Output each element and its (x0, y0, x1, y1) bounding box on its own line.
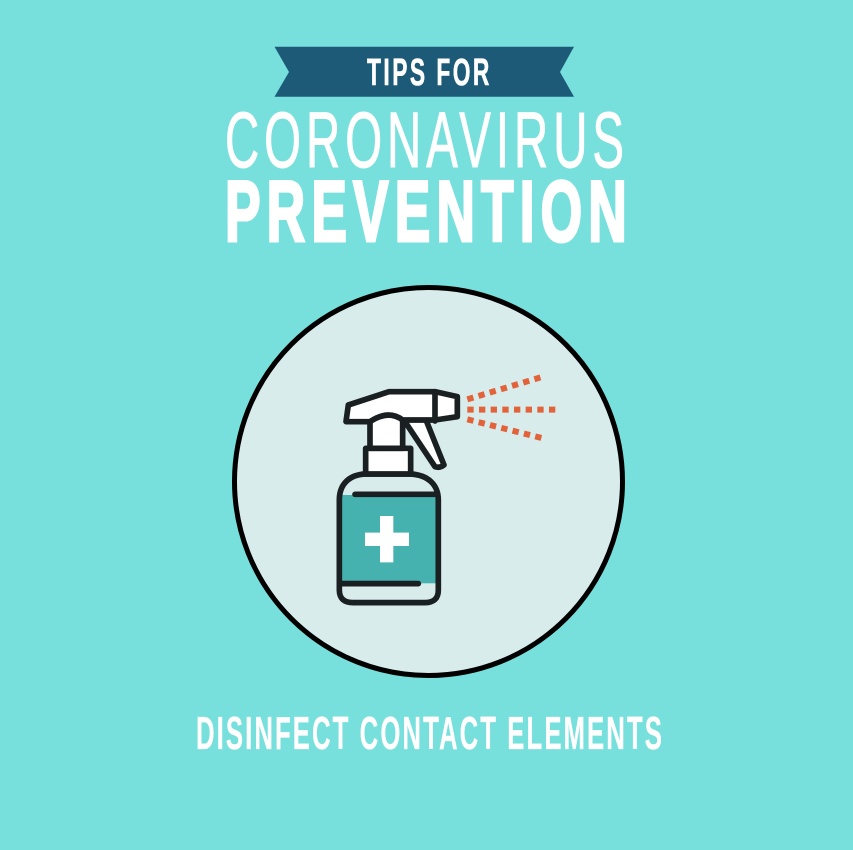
illustration circle (234, 288, 622, 676)
bottle collar (366, 448, 411, 474)
spray line top (467, 377, 541, 399)
banner heading: tips for: TIPS FOR (367, 51, 489, 93)
bottle label (342, 495, 437, 583)
title line: coronavirus: CORONAVIRUS (225, 95, 624, 184)
spray line middle (467, 401, 555, 419)
bottle body (339, 474, 438, 603)
caption: DISINFECT CONTACT ELEMENTS (196, 707, 662, 759)
banner ribbon (274, 47, 574, 97)
spray line bottom (467, 419, 542, 438)
spray mist (467, 377, 555, 438)
icon: spray bottle (339, 377, 555, 603)
nozzle divider (426, 392, 443, 421)
neck (370, 415, 403, 448)
bottle outline (339, 474, 438, 603)
label top line (355, 486, 437, 503)
label bottom line (340, 575, 418, 592)
sprayer head (346, 392, 457, 422)
trigger (405, 418, 444, 467)
title line: prevention: PREVENTION (225, 164, 627, 260)
medical cross (365, 516, 409, 562)
